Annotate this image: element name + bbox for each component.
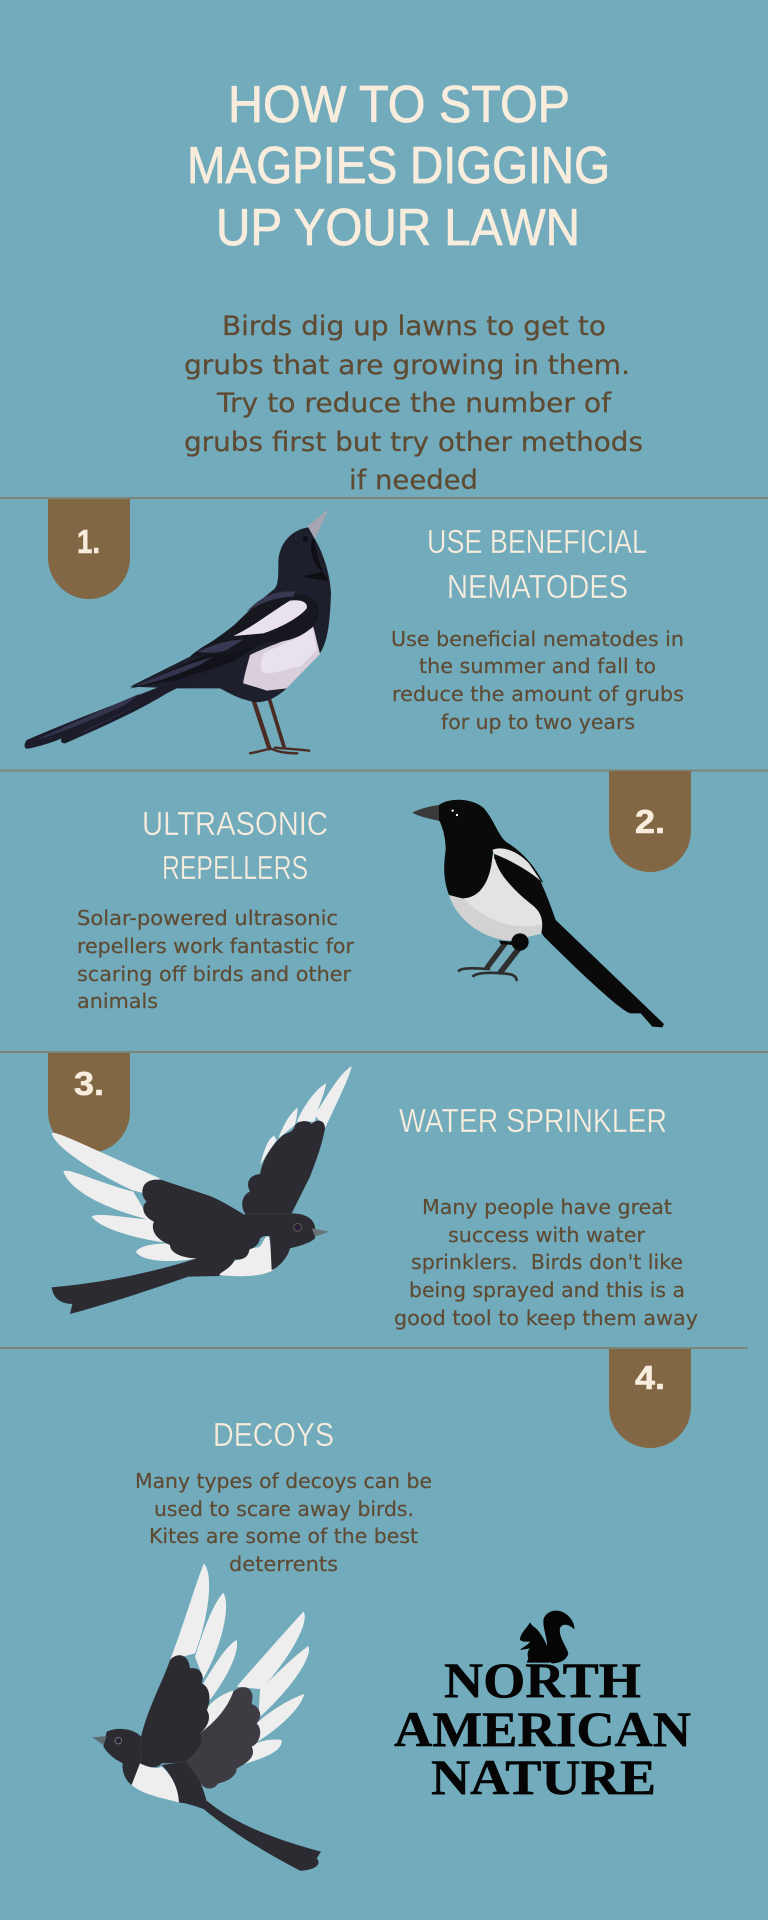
text: step 3 description: success with water	[448, 1223, 646, 1247]
intro text: grubs first but try other methods	[184, 427, 643, 458]
badge 1	[48, 499, 130, 599]
text: step 1 description: for up to two years	[441, 710, 635, 734]
icon: squirrel	[520, 1611, 574, 1663]
text: step 4 description: deterrents	[229, 1552, 338, 1576]
text: step 3 description: good tool to keep them away	[394, 1306, 698, 1330]
text: step 3 description: sprinklers. Birds don't like	[411, 1250, 683, 1274]
logo: north american nature: NORTH	[444, 1652, 641, 1708]
text: step 2 description: Solar-powered ultrasonic	[77, 906, 338, 930]
intro text: grubs that are growing in them.	[184, 350, 630, 381]
panel: step 2 ultrasonic repellers	[77, 771, 691, 1027]
badge 4: 4.	[635, 1359, 665, 1396]
text: step 1 description: reduce the amount of grubs	[392, 682, 684, 706]
heading: ultrasonic repellers	[142, 805, 328, 886]
text: step 3 description	[394, 1195, 698, 1330]
text: step 2 description: animals	[77, 989, 158, 1013]
text: step 1 description: the summer and fall to	[419, 654, 656, 678]
text: step 4 description: used to scare away birds.	[154, 1497, 414, 1521]
intro text: Try to reduce the number of	[216, 388, 612, 419]
text: step 1 description: Use beneficial nematodes in	[391, 627, 684, 651]
panel: step 3 water sprinkler	[48, 1053, 698, 1330]
heading: decoys: DECOYS	[213, 1416, 334, 1453]
title: HOW TO STOP	[228, 76, 570, 134]
text: step 3 description: Many people have great	[422, 1195, 672, 1219]
logo: north american nature	[394, 1611, 691, 1805]
intro text: Birds dig up lawns to get to	[222, 311, 606, 342]
heading: use beneficial nematodes	[427, 523, 647, 605]
text: step 1 description	[391, 627, 684, 734]
title	[187, 76, 610, 257]
badge 1: 1.	[77, 523, 100, 560]
badge 3	[48, 1053, 130, 1153]
badge 2: 2.	[635, 803, 665, 840]
title: UP YOUR LAWN	[216, 199, 580, 257]
intro text: if needed	[349, 465, 478, 496]
heading: ultrasonic repellers: REPELLERS	[162, 849, 308, 886]
panel: step 1 beneficial nematodes	[25, 499, 684, 753]
text: step 2 description: scaring off birds and other	[77, 962, 352, 986]
badge 3: 3.	[74, 1065, 104, 1102]
icon: perched magpie	[412, 800, 664, 1027]
icon: magpie looking up	[25, 509, 331, 753]
intro text	[184, 311, 643, 496]
title: MAGPIES DIGGING	[187, 137, 610, 195]
badge 4	[609, 1349, 691, 1448]
badge 2	[609, 771, 691, 872]
icon: flying magpie facing right	[52, 1066, 352, 1314]
heading: use beneficial nematodes: NEMATODES	[447, 568, 628, 605]
text: step 3 description: being sprayed and this is a	[409, 1278, 685, 1302]
icon: flying magpie facing left	[92, 1563, 321, 1871]
text: step 4 description: Kites are some of the best	[149, 1524, 418, 1548]
text: step 2 description	[77, 906, 355, 1013]
text: step 4 description	[135, 1469, 432, 1576]
panel: step 4 decoys	[92, 1349, 691, 1871]
heading: ultrasonic repellers: ULTRASONIC	[142, 805, 328, 842]
logo: north american nature: NATURE	[431, 1749, 656, 1805]
heading: water sprinkler: WATER SPRINKLER	[399, 1102, 667, 1139]
heading: use beneficial nematodes: USE BENEFICIAL	[427, 523, 647, 560]
logo: north american nature: AMERICAN	[394, 1701, 691, 1757]
text: step 4 description: Many types of decoys can be	[135, 1469, 432, 1493]
text: step 2 description: repellers work fantastic for	[77, 934, 355, 958]
